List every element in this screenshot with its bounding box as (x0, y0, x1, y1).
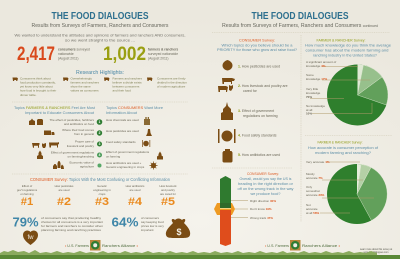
labels: accuracy: Only (306, 185, 313, 189)
rank 5 (159, 184, 177, 208)
highlight 2: farmers and ranchers (70, 80, 100, 84)
row 1 (29, 117, 150, 126)
row 3: 3 (99, 142, 101, 146)
priority 1: 1. How pesticides are used (238, 64, 280, 68)
intro text: so we went straight to the source ... (65, 38, 135, 42)
rank 5: How livestock (159, 184, 177, 188)
question: PRIORITY for those who grow and raise food? (217, 48, 297, 52)
icon: money bags (53, 161, 64, 169)
stat: farmers and ranchers surveyed: 1,002 (103, 44, 146, 65)
icon: sun gear (150, 162, 158, 170)
highlight 1 (12, 76, 56, 97)
row 5: agriculture (80, 164, 94, 168)
icon: cow and hen (218, 78, 235, 92)
rank 3: crops (99, 192, 106, 196)
highlight 1: Consumers think about (20, 76, 51, 80)
title: THE FOOD DIALOGUES (52, 10, 148, 22)
rank 2: are used (59, 188, 70, 192)
row 5 (53, 160, 158, 170)
stat: 79 percent (12, 214, 103, 232)
logo: U.S. Farmers and Ranchers Alliance, right (265, 240, 341, 250)
highlight 3: and their food (112, 88, 131, 92)
stat: 64 percent: 64% (112, 214, 139, 230)
stat: farmers and ranchers surveyed (103, 44, 178, 65)
stat: 79 percent: of consumers say that producing healthy (41, 216, 102, 220)
stat: 64 percent: of consumers (141, 216, 160, 220)
rank 3 (93, 184, 111, 208)
panel: survey overview (14, 10, 186, 65)
row 2: How pesticides are used (106, 129, 139, 133)
labels: accuracy: somewhat (306, 189, 320, 193)
labels: knowledge: No knowledge (306, 104, 325, 108)
labels: accuracy: at all 58% (306, 211, 320, 215)
question: How much knowledge do you think the average (305, 44, 391, 48)
row 1: 1 (99, 120, 101, 124)
priority 4: 4. Food safety standards (238, 134, 277, 138)
question (217, 44, 297, 52)
row 1: and antibiotics on food (64, 122, 94, 126)
intro text: We wanted to understand the attitudes and opinions of farmers and ranchers AND consumers, (14, 32, 186, 38)
section: topics comparison (14, 105, 163, 170)
heading: consumer topics: Information About (106, 110, 138, 115)
highlight 2: show the same (70, 84, 91, 88)
priority 3 (221, 102, 278, 120)
stat: farmers and ranchers surveyed: surveyed nationwide (148, 52, 178, 56)
rank 4 (126, 184, 145, 208)
highlight 3: believe a divide exists (112, 80, 142, 84)
labels: accuracy: Mostly (306, 172, 315, 176)
priority 3: regulations on farming (243, 114, 278, 118)
labels: knowledge: 10% (306, 112, 312, 116)
footnote: www.fooddialogues.com (364, 252, 388, 254)
rank 5: and poultry (161, 188, 176, 192)
heading: consumer topics: Topics CONSUMERS Want More (106, 105, 163, 110)
stat: consumers surveyed: (August 2011) (58, 56, 78, 60)
row 5: Genetic engineering in crops (106, 165, 145, 169)
labels: direction bar: Don't know 19% (250, 207, 272, 211)
row 4: on farming (106, 154, 121, 158)
logo: U.S. Farmers and Ranchers Alliance, right: • U.S. Farmers (265, 244, 289, 248)
icon: heart: fw (28, 235, 34, 241)
pie chart: accuracy (327, 164, 387, 224)
title: THE FOOD DIALOGUES (252, 10, 348, 22)
stat: 79 percent: planning farming and ranching practices (41, 228, 102, 232)
stat: consumers surveyed: consumers surveyed (58, 48, 90, 52)
stat: consumers surveyed: nationwide (58, 52, 74, 56)
rank 4: are used (130, 188, 141, 192)
priority 5: 5. How antibiotics are used (238, 153, 280, 157)
highlight 3 (104, 76, 143, 92)
icon: capitol (221, 102, 233, 120)
rank 1 (17, 184, 38, 208)
row 2: 2 (99, 131, 101, 135)
row 4: Effect of government regulations (106, 150, 150, 154)
row 4 (37, 150, 163, 160)
rank 1: Effect of (22, 184, 32, 188)
question: ranching industry in the United States? (313, 54, 377, 58)
labels: knowledge: at all (306, 108, 313, 112)
heading: FARMER & RANCHER Survey: (316, 38, 366, 42)
rank 5: #5 (161, 196, 175, 208)
intro text (14, 32, 186, 42)
rank 1: gov't regulations (17, 188, 38, 192)
question (305, 44, 391, 58)
stat: 79 percent: choices for all consumers is a very important (41, 220, 103, 224)
heading: Research Highlights: (76, 70, 124, 76)
stat: consumers surveyed (17, 44, 90, 65)
labels: knowledge: 70% (306, 95, 312, 99)
highlight 2 (63, 76, 100, 92)
labels: knowledge: Some (306, 73, 314, 77)
question: heading in the right direction or (238, 182, 294, 186)
icon: truck (44, 130, 54, 135)
logo: U.S. Farmers and Ranchers Alliance, left (65, 240, 139, 250)
subtitle: Results from Surveys of Farmers, Ranchers and Consumers continued (222, 23, 378, 29)
highlight 4: Consumers are firmly (157, 76, 186, 80)
labels: direction bar: Right direction 30% (250, 199, 276, 203)
highlight 4 (147, 76, 187, 88)
grass strip (0, 250, 400, 259)
rank 3: #3 (95, 196, 109, 208)
icon: insect (222, 60, 232, 70)
section: direction survey (214, 172, 294, 246)
row 4: on farming/ranching (67, 154, 94, 158)
row 2: Where their food comes (62, 128, 94, 132)
priority 3: 3. Effect of government (238, 109, 274, 113)
labels: accuracy (306, 160, 374, 215)
heading: farmers and ranchers topics: Important to Educate Consumers About (25, 110, 95, 115)
row 4: Effect of government regulations (51, 150, 94, 154)
icon: money purse (166, 218, 190, 238)
labels: direction bar (231, 199, 276, 220)
row 5: Economic value of (69, 160, 94, 164)
priority 2: cared for (243, 89, 258, 93)
stat: 64 percent: important (141, 228, 154, 232)
rank 3: Genetic (97, 184, 107, 188)
question: modern farming and ranching? (315, 151, 371, 155)
heading: CONSUMER Survey: Topics With the Most Confusing or Conflicting Information (30, 177, 171, 182)
heading: CONSUMER Survey: (247, 172, 279, 176)
row 3 (32, 140, 150, 148)
labels: knowledge: knowledge 17% (306, 77, 328, 81)
stat: 64 percent (112, 214, 164, 232)
row 5: How antibiotics are used + (106, 161, 142, 165)
icon: fertilizer bags (29, 118, 43, 125)
stat: consumers surveyed: 2,417 (17, 44, 55, 65)
labels: knowledge (306, 60, 372, 116)
question: Which topics do you believe should be a (222, 44, 293, 48)
subtitle: Results from Surveys of Farmers, Ranchers and Consumers (32, 23, 169, 29)
rank 2 (55, 184, 74, 208)
labels: accuracy: accurate 33% (306, 193, 325, 197)
labels: accuracy: Not (306, 203, 311, 207)
footnote (360, 248, 393, 254)
row 3: livestock and poultry (67, 144, 94, 148)
stat: farmers and ranchers surveyed: farmers & ranchers (148, 48, 178, 52)
heading: farmers and ranchers topics (14, 105, 96, 115)
section: key percentages (12, 214, 190, 245)
panel: detailed survey results (222, 10, 378, 29)
labels: direction bar: Wrong track 47% (250, 216, 273, 220)
labels: knowledge: Very little (306, 87, 319, 91)
heading: CONSUMER Survey: (239, 38, 275, 42)
section: confusing topics ranking (17, 177, 177, 208)
rank 4: How antibiotics (126, 184, 145, 188)
icon: medicine bottle (222, 149, 232, 162)
heading: consumer topics (106, 105, 163, 115)
section: research highlights (12, 70, 187, 97)
priority 2 (218, 78, 288, 93)
rank 1: #1 (21, 196, 33, 208)
highlight 1: yet know very little about (20, 84, 53, 88)
labels: accuracy: Very accurate 1% (306, 160, 330, 164)
row 1: The effect of pesticides, fertilizers (50, 118, 94, 122)
logo: U.S. Farmers and Ranchers Alliance, right: Ranchers Alliance • (302, 244, 341, 248)
highlight 1: food production constantly, (20, 80, 56, 84)
icon: plate (142, 140, 150, 147)
priority 2: 2. How livestock and poultry are (238, 84, 288, 88)
stat: 64 percent: prices low is very (141, 224, 164, 228)
highlight 4: of modern agriculture (157, 84, 186, 88)
footnote: Learn more about this survey at (360, 248, 393, 251)
row 3: Proper care of (75, 140, 94, 144)
highlight 2: values as consumers (70, 88, 99, 92)
highlight 1: dinner table. (20, 93, 37, 97)
logo: U.S. Farmers and Ranchers Alliance, left: • U.S. Farmers (65, 244, 89, 248)
rank 4: #4 (128, 196, 143, 208)
labels: knowledge: knowledge (306, 91, 321, 95)
question: consumer has about the modern farming and (306, 48, 388, 52)
labels: knowledge: knowledge 3% (306, 64, 326, 68)
labels: accuracy: accurate 7% (306, 176, 323, 180)
heading: farmers and ranchers topics: Topics FARMERS & RANCHERS Feel Are Most (14, 105, 96, 110)
row 3: Food safety standards (106, 140, 136, 144)
rank 1: on farming (20, 192, 34, 196)
rank 3: engineering in (93, 188, 111, 192)
row 2 (44, 128, 152, 136)
labels: accuracy: accurate (306, 207, 318, 211)
question (308, 146, 379, 155)
heading: FARMER & RANCHER Survey: (318, 140, 362, 144)
section: consumer priority survey (217, 38, 297, 162)
highlight 3: Farmers and ranchers (112, 76, 143, 80)
row 4: 4 (99, 153, 101, 157)
icon: money purse: $ (176, 227, 182, 237)
rank 2: #2 (57, 196, 71, 208)
icon: plate with cutlery (218, 129, 236, 143)
stat: farmers and ranchers surveyed: (August 2011) (148, 56, 168, 60)
highlight 2: Overwhelmingly (70, 76, 92, 80)
icon: heart (23, 231, 38, 245)
question (238, 177, 294, 196)
row 1: How chemicals are used (106, 118, 139, 122)
stat: 79 percent: for farmers and ranchers to consider when (41, 224, 103, 228)
section: perception accuracy survey (306, 140, 387, 224)
rank 2: How pesticides (55, 184, 74, 188)
question: How accurate is consumer perception of (308, 146, 379, 150)
icon: livestock (32, 142, 59, 148)
question: off on the wrong track in the way (238, 187, 294, 191)
icon: capitol (37, 150, 43, 159)
highlight 1: how food is brought to their (20, 88, 56, 92)
stat: 64 percent: say keeping food (141, 220, 164, 224)
highlight 3: between consumers (112, 84, 140, 88)
labels: knowledge: A significant amount of (306, 60, 336, 64)
row 2: from in general (74, 132, 94, 136)
question: we produce food? (250, 192, 280, 196)
rank 5: are cared for (160, 192, 176, 196)
pie chart: knowledge (327, 64, 388, 126)
logo: U.S. Farmers and Ranchers Alliance, left: Ranchers Alliance • (102, 244, 139, 248)
chart: direction bar (214, 176, 235, 246)
question: Overall, would you say the US is (240, 177, 292, 181)
section: consumer knowledge survey (305, 38, 391, 126)
highlight 4: divided in the direction (157, 80, 187, 84)
stat: 79 percent: 79% (12, 214, 39, 230)
